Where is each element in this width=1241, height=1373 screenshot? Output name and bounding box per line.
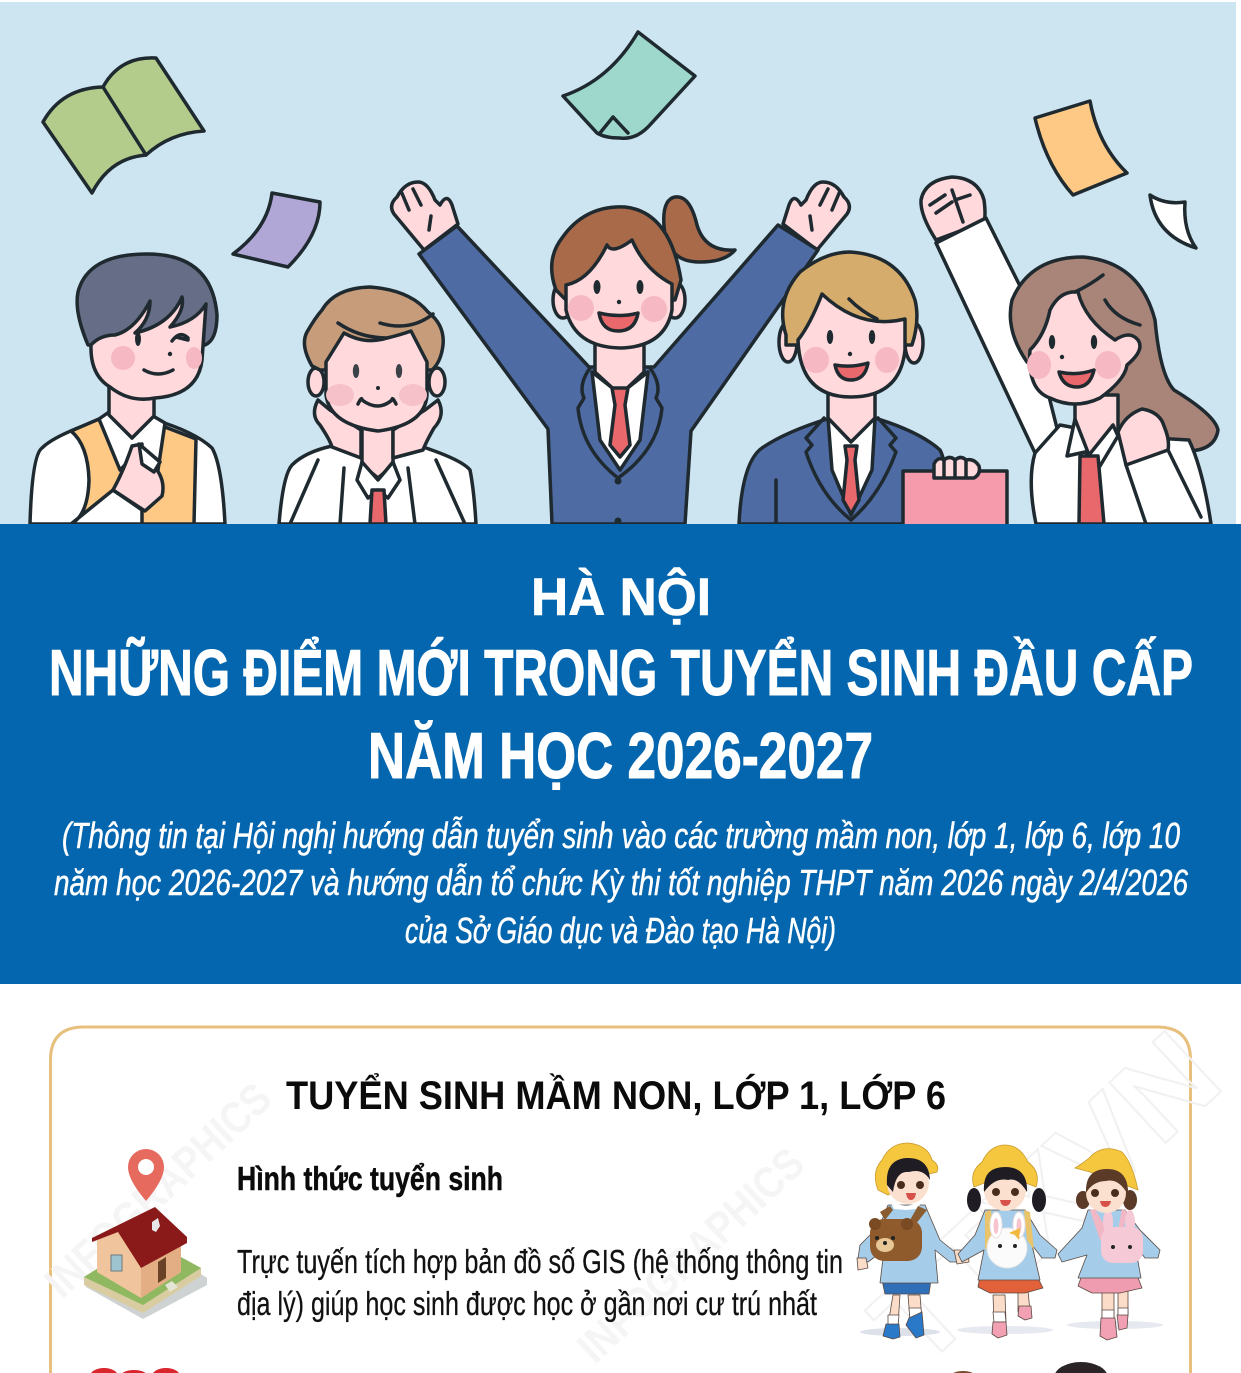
text block: admission form description <box>237 1243 843 1322</box>
icon: house with location pin <box>84 1149 207 1319</box>
subtitle text block <box>54 815 1189 951</box>
panel heading: TUYỂN SINH MẦM NON, LỚP 1, LỚP 6 <box>286 1071 946 1118</box>
child with bear backpack <box>857 1143 969 1339</box>
child with rabbit backpack <box>958 1145 1057 1338</box>
icon: location pin <box>128 1149 164 1201</box>
icon: purple paper <box>233 193 320 267</box>
panel: admissions for preschool, grade 1, grade 6: INFOGRAPHICS <box>568 1139 814 1372</box>
icon: white paper <box>1150 195 1196 248</box>
title: main line 2: NĂM HỌC 2026-2027 <box>368 719 873 792</box>
title: city name: HÀ NỘI <box>531 566 711 627</box>
icon: teal paper <box>563 32 695 138</box>
icon: pink folder <box>903 458 1007 527</box>
character: blond boy holding pink folder <box>739 252 1007 527</box>
text block: admission form description: Trực tuyến tích hợp bản đồ số GIS (hệ thống thông tin <box>237 1243 843 1280</box>
character: boy with hands on cheeks <box>279 287 476 524</box>
illustration: three children holding hands <box>857 1143 1163 1340</box>
character: girl with ponytail, arms raised <box>392 182 849 524</box>
text block: admission form heading: Hình thức tuyển sinh <box>237 1160 503 1197</box>
text block: admission form description: địa lý) giúp học sinh được học ở gần nơi cư trú nhất <box>237 1285 817 1322</box>
subtitle text block: của Sở Giáo dục và Đào tạo Hà Nội) <box>405 910 836 951</box>
icon: partial red icon at page bottom <box>90 1368 180 1373</box>
hero illustration: students celebrating <box>0 2 1236 527</box>
character: girl with long hair raising fist <box>921 177 1218 524</box>
icon: orange paper <box>1035 101 1127 195</box>
panel: admissions for preschool, grade 1, grade 6 <box>35 1007 1241 1373</box>
illustration: partial heads at page bottom <box>949 1362 1108 1373</box>
child with pink rabbit backpack <box>1058 1149 1160 1340</box>
character: boy with orange vest <box>30 254 225 524</box>
panel: admissions for preschool, grade 1, grade 6: INFOGRAPHICS <box>35 1074 281 1307</box>
icon: open green book <box>43 58 204 193</box>
title band <box>0 524 1241 984</box>
